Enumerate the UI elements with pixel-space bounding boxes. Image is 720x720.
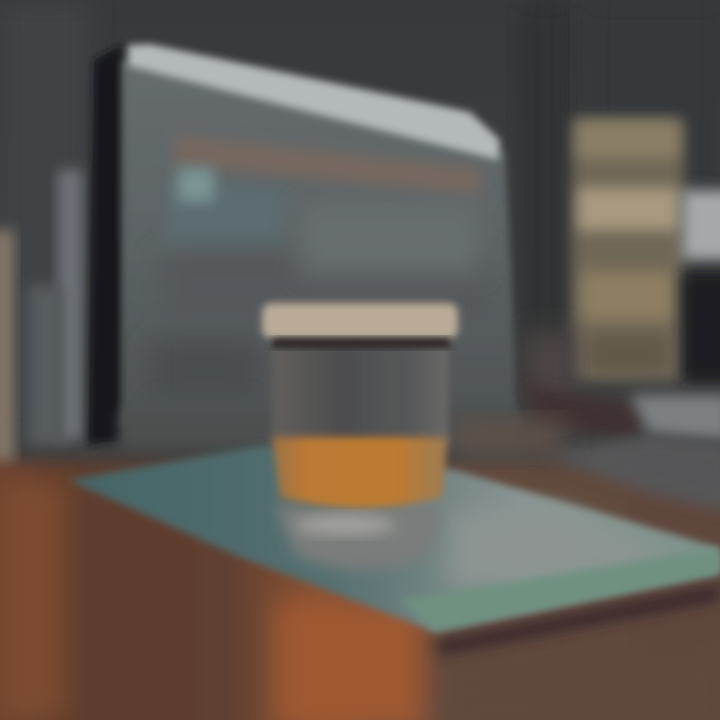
monitor bright top edge [128,44,500,160]
mat front edge [400,548,720,632]
glass of amber drink [262,303,458,570]
objects on desk at right [455,330,720,512]
teal desk mat [68,445,720,655]
dark band under rim [272,338,450,348]
glass foam rim [262,303,458,339]
wooden desk [0,462,720,720]
glass lower base [275,505,445,570]
mat shadow [435,585,720,655]
mat highlight [450,510,680,590]
screen chart block [165,175,290,250]
glass gray body [272,345,448,440]
screen header band [175,135,480,195]
monitor base [120,410,520,448]
monitor [88,44,520,448]
amber liquid [272,437,448,508]
base highlight [295,515,395,535]
left side objects [0,170,82,470]
far right window and dark object [682,190,720,382]
monitor bezel [88,45,122,445]
monitor screen [122,60,518,425]
right tan display [572,118,684,380]
